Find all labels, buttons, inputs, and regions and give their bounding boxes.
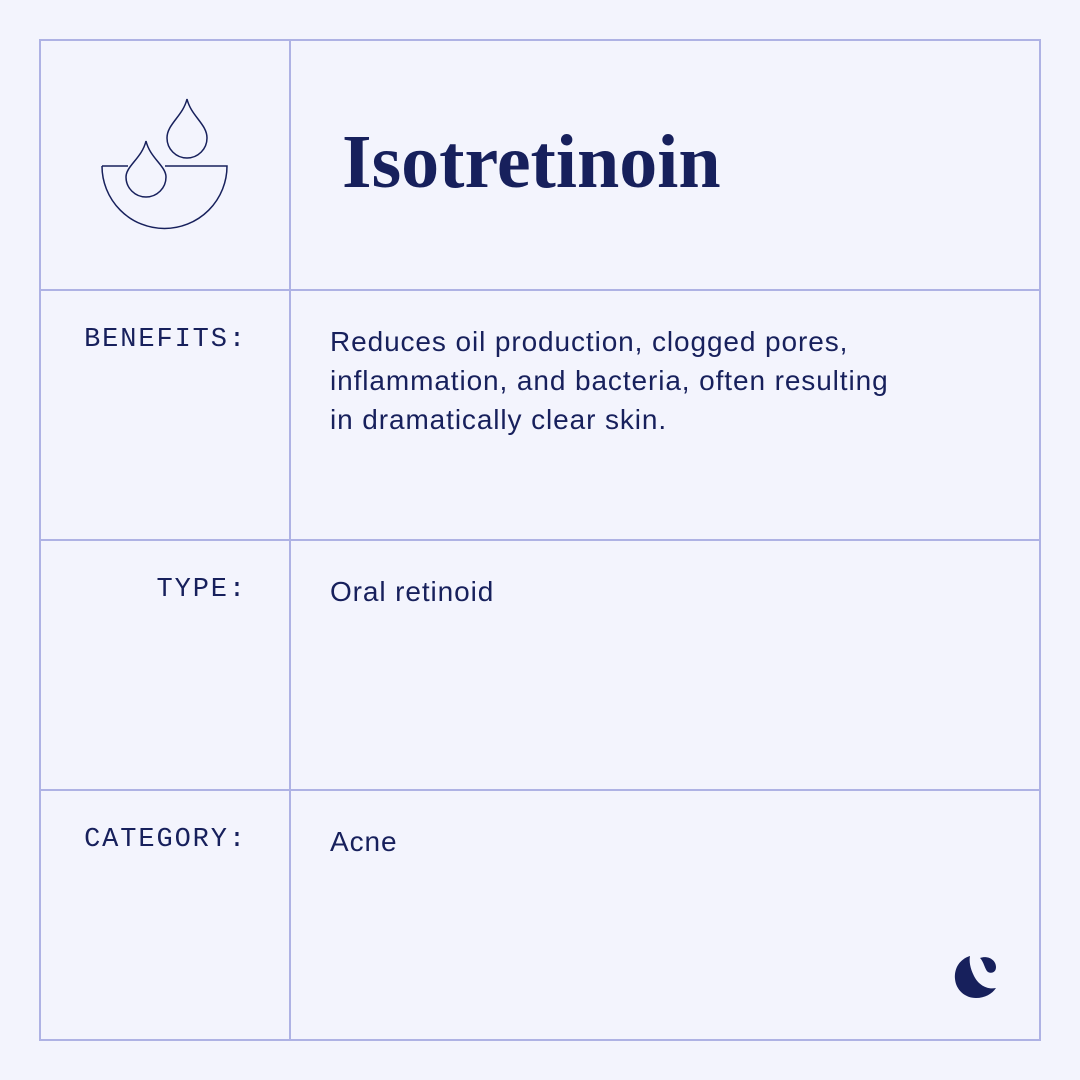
title: Isotretinoin bbox=[342, 120, 721, 204]
label: benefits: BENEFITS: bbox=[84, 325, 247, 355]
text: benefits bbox=[330, 326, 889, 435]
icon: bowl with drops bbox=[101, 98, 228, 230]
logo bbox=[954, 956, 996, 998]
text: benefits: in dramatically clear skin. bbox=[330, 404, 667, 435]
label: type: TYPE: bbox=[156, 575, 247, 605]
text: benefits: inflammation, and bacteria, often resulting bbox=[330, 365, 889, 396]
text: category: Acne bbox=[330, 826, 397, 857]
label: category: CATEGORY: bbox=[84, 825, 247, 855]
text: benefits: Reduces oil production, clogged pores, bbox=[330, 326, 848, 357]
text: type: Oral retinoid bbox=[330, 576, 494, 607]
